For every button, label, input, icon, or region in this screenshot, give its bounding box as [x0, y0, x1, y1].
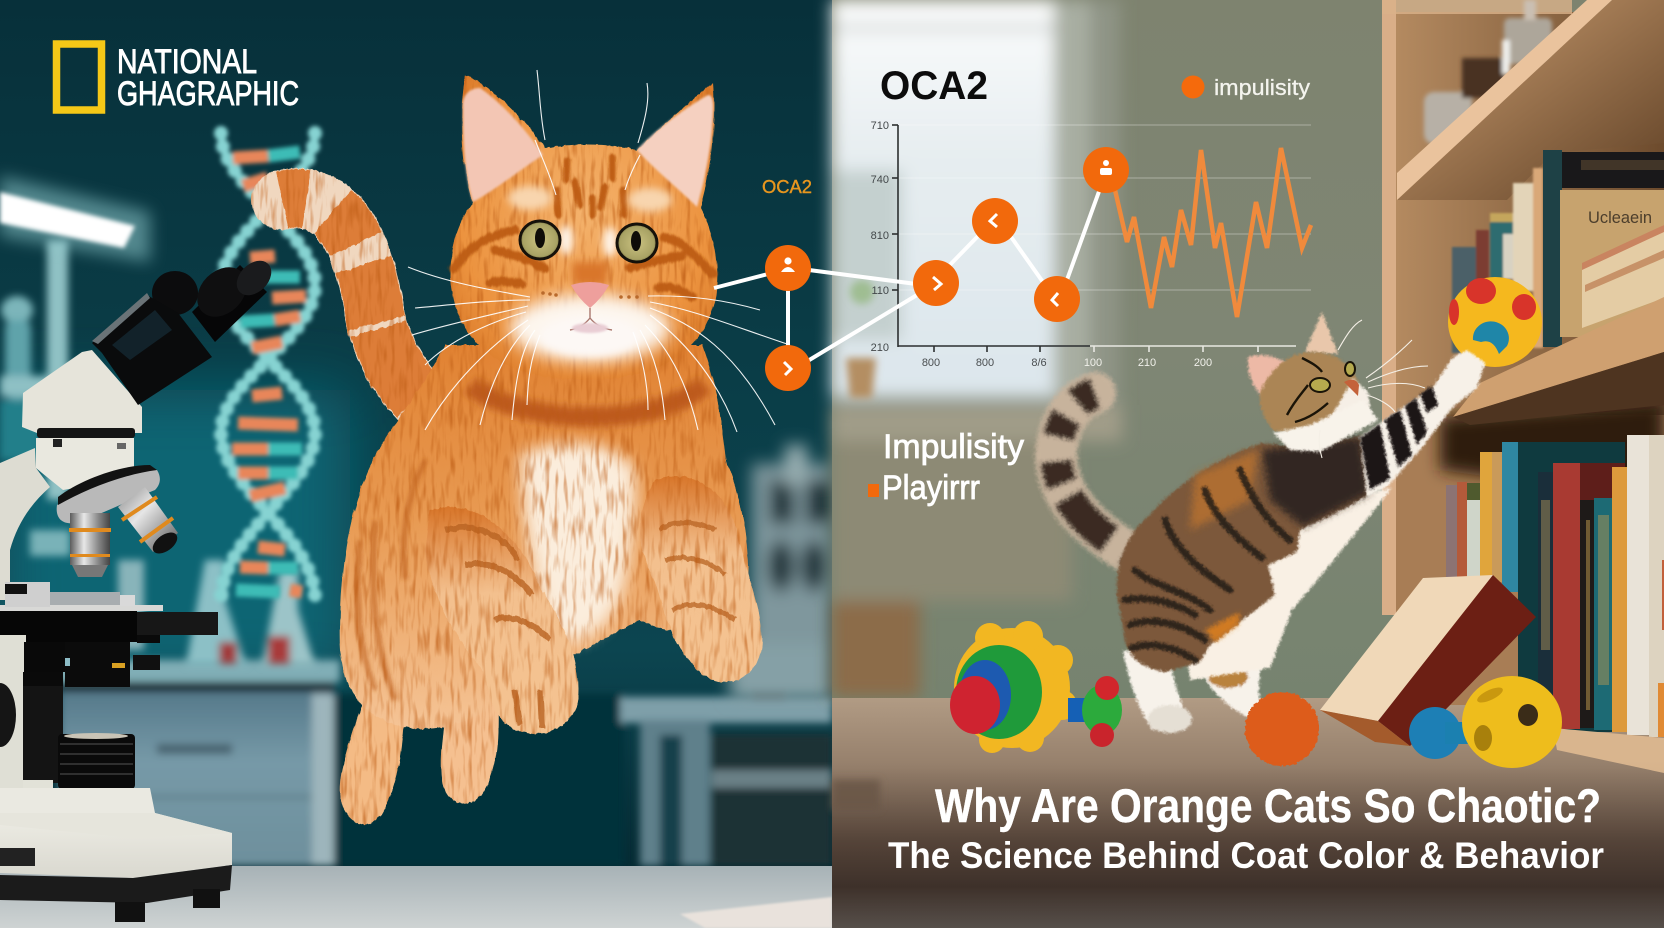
cat left forepaw	[425, 507, 579, 734]
tan book with title	[1560, 190, 1664, 337]
cat right forepaw	[640, 476, 762, 682]
blurred lab furniture	[0, 660, 832, 866]
teal wall glow	[0, 390, 350, 680]
focus cylinder	[58, 734, 135, 789]
blurred window	[832, 0, 1122, 697]
orange zigzag series	[1115, 148, 1311, 317]
middle-shelf blurred books	[1452, 168, 1543, 353]
chart node 4: person icon	[1083, 147, 1129, 193]
binocular eyepieces	[152, 271, 198, 315]
x-axis labels: 100	[1084, 357, 1102, 369]
cat belly fur	[520, 443, 635, 641]
chart heading: OCA2	[880, 64, 988, 108]
nose	[571, 282, 609, 308]
black book	[1543, 150, 1562, 347]
connector lines	[714, 186, 1101, 362]
toy: orange fuzzy ball	[1245, 692, 1319, 766]
tabby fur group	[1056, 312, 1485, 733]
top shelf	[1397, 0, 1664, 200]
tabby eyes and nose	[1287, 358, 1359, 422]
blurred flasks	[0, 240, 315, 665]
tabby ears and face	[1305, 312, 1338, 354]
forehead and cheek stripes	[454, 157, 713, 297]
collar	[1273, 400, 1378, 452]
DNA double helix	[221, 133, 315, 600]
mouth	[570, 308, 612, 330]
bookcase	[1382, 0, 1664, 773]
second shelf	[1453, 297, 1664, 417]
microscope base	[0, 788, 155, 813]
panel: laboratory scene with orange cat	[0, 0, 832, 928]
body stripes	[1125, 470, 1290, 660]
toy: yellow ball with spots	[1448, 277, 1542, 367]
body shading	[1262, 437, 1370, 527]
x-axis labels: 800	[922, 357, 940, 369]
bottom shade	[832, 760, 1664, 928]
axes	[892, 125, 1296, 352]
microscope pillar	[0, 635, 26, 790]
icon: yellow frame	[56, 44, 102, 110]
pale face patches	[508, 186, 672, 257]
tabby body	[1117, 436, 1372, 672]
node: chevron lower left	[765, 345, 811, 391]
label: Playirrr: Playirrr	[882, 469, 980, 507]
orange cat leaping	[282, 70, 790, 825]
tabby tail	[1056, 393, 1143, 560]
paper on bench	[680, 897, 832, 928]
cat head shape	[451, 75, 717, 380]
wall	[832, 0, 1664, 705]
line chart	[871, 120, 1311, 369]
legend label: impulisity	[1214, 75, 1310, 100]
leaning book	[1320, 575, 1536, 746]
cat flank stripes	[357, 460, 425, 700]
blurred plant and pot	[846, 280, 876, 398]
y-axis labels: 210	[871, 342, 889, 354]
y-axis labels	[871, 120, 889, 354]
whiskers	[408, 70, 790, 432]
lower shelf edge	[1553, 728, 1664, 773]
lab background wall	[0, 0, 832, 866]
legend	[1182, 75, 1310, 100]
cat tail	[282, 198, 425, 405]
node: person icon upper left	[765, 245, 811, 291]
panel: home scene with tabby cat	[832, 0, 1664, 928]
logo wordmark: GHAGRAPHIC	[117, 75, 299, 113]
muzzle	[510, 294, 670, 362]
ceiling light	[0, 176, 150, 262]
lab bench surface	[0, 866, 832, 928]
legend marker	[1182, 76, 1204, 98]
microscope rear arm	[0, 448, 50, 600]
toy: multicolor rattle	[950, 621, 1122, 753]
arm stripes	[1360, 386, 1438, 490]
subtitle: The Science Behind Coat Color & Behavior	[888, 835, 1604, 876]
y-axis labels: 110	[871, 285, 889, 297]
microscope head	[22, 350, 142, 433]
nosepiece	[57, 470, 160, 523]
stacked books	[1582, 225, 1664, 328]
left eye	[520, 221, 560, 259]
ear inners	[463, 88, 543, 202]
toy: blue dumbbell	[1409, 707, 1475, 759]
floor	[832, 698, 1664, 928]
chart node 3	[1034, 276, 1080, 322]
x-axis labels	[922, 357, 1212, 369]
tabby belly	[1185, 488, 1392, 680]
whisker spots	[541, 291, 639, 299]
nose bridge	[572, 262, 608, 285]
logo wordmark: NATIONAL	[117, 43, 257, 81]
objective lenses	[70, 513, 110, 565]
y-axis labels: 810	[871, 230, 889, 242]
back panels	[1396, 12, 1664, 202]
gridlines	[898, 125, 1311, 290]
logo	[56, 43, 299, 113]
tan book with title: Ucleaein	[1588, 208, 1652, 227]
upright	[1382, 0, 1396, 615]
x-axis labels: 8/6	[1031, 357, 1047, 369]
chart node 1	[913, 260, 959, 306]
toy: yellow holed ball	[1462, 676, 1562, 768]
label: OCA2: OCA2	[762, 177, 812, 197]
x-axis labels: 800	[976, 357, 994, 369]
label: Impulisity: Impulisity	[883, 428, 1024, 466]
blurred wire rack	[730, 445, 832, 700]
microscope	[0, 254, 278, 922]
tabby whiskers	[1319, 320, 1428, 458]
microscope stage	[0, 605, 163, 611]
cat hind legs	[340, 695, 405, 825]
cat neck band	[470, 385, 705, 417]
network connectors and nodes	[714, 147, 1129, 391]
cat body	[340, 345, 749, 729]
x-axis labels: 200	[1194, 357, 1212, 369]
y-axis labels: 710	[871, 120, 889, 132]
tabby arm	[1360, 350, 1485, 497]
tabby cat	[1056, 312, 1485, 733]
cat fur group	[282, 75, 762, 825]
right eye	[617, 224, 657, 262]
blurred jars	[1424, 0, 1552, 144]
tabby hind legs	[1123, 650, 1262, 733]
lower books	[1446, 435, 1664, 737]
y-axis labels: 740	[871, 174, 889, 186]
chart node 2	[972, 198, 1018, 244]
logo wordmark	[117, 43, 299, 113]
x-axis labels: 210	[1138, 357, 1156, 369]
